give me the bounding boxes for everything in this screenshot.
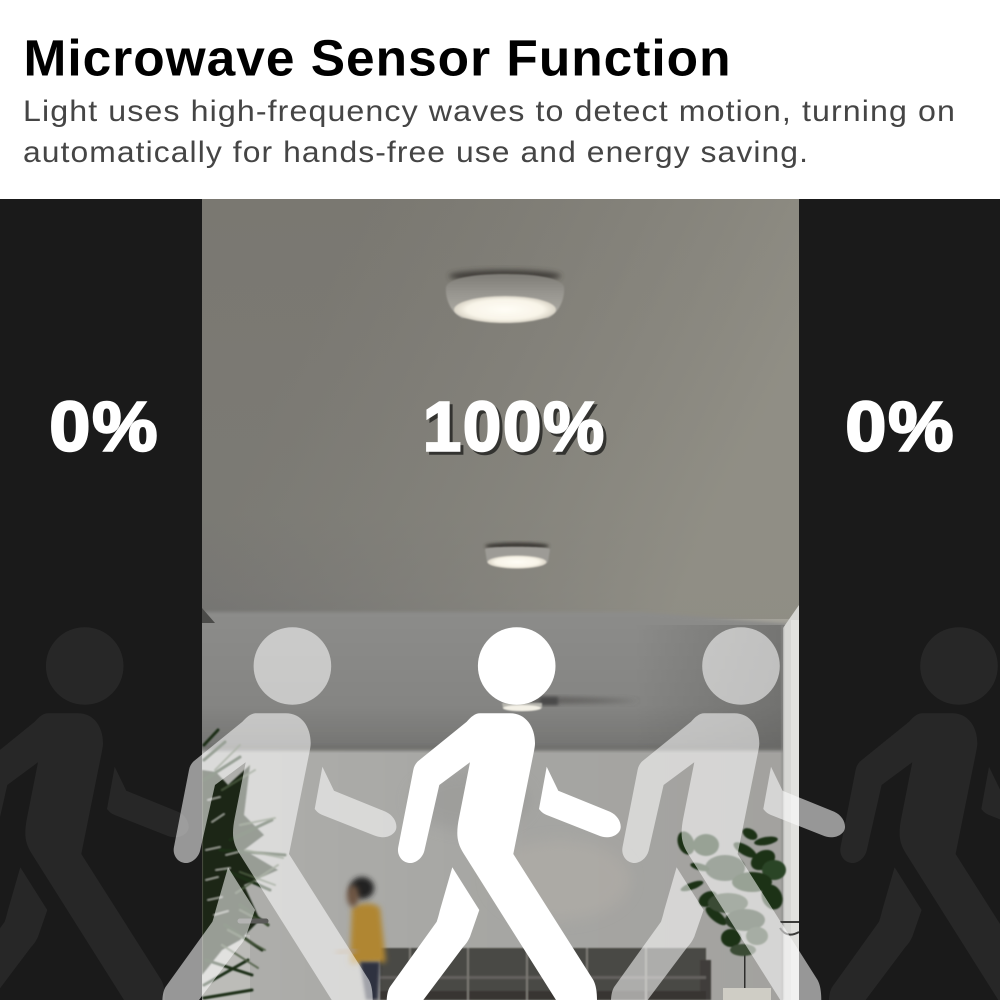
- panel: corridor photo: [190, 199, 820, 1000]
- panel: dark left: [0, 199, 202, 1000]
- label: left 0%: 0%: [50, 388, 160, 466]
- subtitle text block: [23, 95, 956, 169]
- plant right: [674, 826, 787, 956]
- label: center 100%: 100%: [426, 390, 609, 468]
- figure: left corridor walker: [162, 627, 396, 1000]
- panel: dark right: [799, 199, 1000, 1000]
- subtitle text block: Light uses high-frequency waves to detect motion, turning on: [23, 95, 956, 128]
- wall column right: [781, 605, 799, 1000]
- lamp: distant ceiling light: [502, 697, 640, 711]
- blurred person: [336, 877, 386, 1000]
- figure: right corridor walker: [611, 627, 845, 1000]
- wall block left: [202, 935, 250, 1000]
- subtitle text block: automatically for hands-free use and energy saving.: [23, 136, 809, 169]
- rail by left plant: [240, 918, 266, 924]
- figure: far right walker: [829, 627, 1000, 1000]
- figure: center walker: [387, 627, 621, 1000]
- pot and stem of right plant: [723, 922, 799, 1000]
- label: right 0%: 0%: [846, 388, 956, 466]
- figure: far left walker: [0, 627, 189, 1000]
- benches: [380, 948, 711, 1000]
- lamp: mid ceiling light: [485, 542, 550, 568]
- plant left: [202, 730, 285, 998]
- label: center 100%: 100%: [423, 388, 606, 466]
- lamp: large ceiling light: [446, 270, 564, 323]
- title: Microwave Sensor Function: [24, 30, 732, 86]
